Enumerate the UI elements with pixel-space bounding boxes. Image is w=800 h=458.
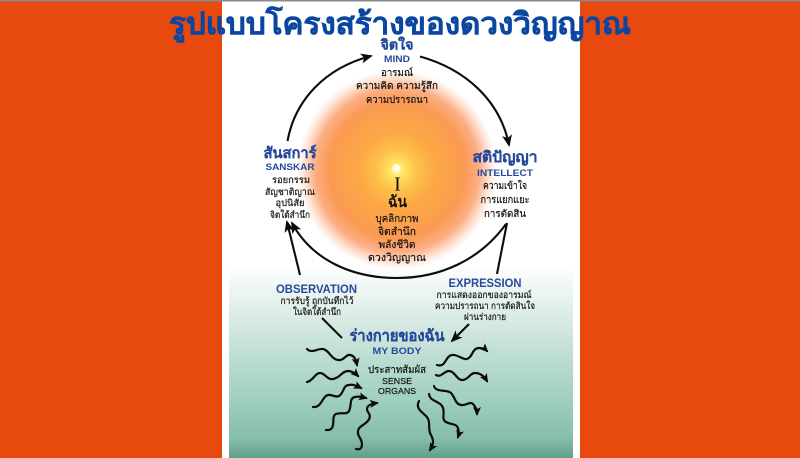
block: intellect: สติปัญญา	[472, 148, 538, 166]
block: mind: MIND	[384, 54, 411, 64]
block: intellect: การตัดสิน	[484, 209, 526, 220]
block: intellect: ความเข้าใจ	[483, 180, 527, 192]
block: sanskar: SANSKAR	[266, 162, 315, 172]
block: I: I	[394, 174, 401, 196]
wavy arrows: outgoing senses	[418, 348, 487, 450]
block: sanskar: สัญชาติญาณ	[265, 187, 315, 198]
block: my body: MY BODY	[372, 346, 422, 357]
block: observation	[276, 284, 357, 318]
arrow: expression to body	[452, 324, 469, 341]
block: mind: อารมณ์	[381, 67, 413, 79]
panel: white poster	[222, 2, 580, 458]
block: my body	[350, 327, 445, 396]
block: sanskar: อุปนิสัย	[276, 198, 304, 209]
line: expression up	[497, 223, 507, 274]
block: observation: ในจิตใต้สำนึก	[293, 306, 341, 318]
block: my body: SENSE	[382, 376, 412, 386]
wavy arrows: incoming senses	[307, 349, 377, 449]
block: observation: การรับรู้ ถูกบันทึกไว้	[280, 295, 354, 307]
block: I: ฉัน	[388, 193, 407, 211]
arrow: sanskar to mind	[288, 56, 371, 141]
block: expression: ผ่านร่างกาย	[464, 312, 506, 323]
block: expression: ความปรารถนา การตัดสินใจ	[435, 300, 535, 312]
block: I: ดวงวิญญาณ	[368, 252, 426, 264]
block: mind	[356, 36, 438, 106]
line: body to observation	[322, 318, 342, 338]
block: my body: ORGANS	[378, 386, 416, 396]
block: intellect	[472, 148, 538, 220]
icon: light point	[392, 164, 400, 172]
block: intellect: INTELLECT	[477, 168, 533, 179]
block: expression	[435, 278, 535, 323]
block: expression: การแสดงออกของอารมณ์	[436, 289, 532, 301]
block: expression: EXPRESSION	[448, 278, 522, 290]
block: sanskar: รอยกรรม	[272, 175, 310, 186]
top grey edge	[0, 0, 800, 2]
block: I: บุคลิกภาพ	[376, 213, 419, 225]
block: mind: ความคิด ความรู้สึก	[356, 80, 438, 92]
block: sanskar	[264, 144, 317, 221]
block: sanskar: จิตใต้สำนึก	[270, 209, 310, 221]
panel: green body zone	[229, 265, 573, 458]
arrow: observation up	[287, 222, 300, 275]
block: I	[368, 174, 426, 264]
block: mind: ความปรารถนา	[366, 95, 428, 106]
block: I: พลังชีวิต	[378, 238, 416, 251]
arrow: intellect to sanskar arc	[292, 223, 506, 278]
block: intellect: การแยกแยะ	[480, 195, 530, 206]
title: รูปแบบโครงสร้างของดวงวิญญาณ	[169, 5, 631, 43]
arrow: mind to intellect	[420, 56, 509, 145]
block: sanskar: สันสการ์	[264, 144, 317, 162]
block: I: จิตสำนึก	[378, 226, 416, 238]
block: observation: OBSERVATION	[276, 284, 357, 296]
block: my body: ร่างกายของฉัน	[350, 327, 445, 345]
block: mind: จิตใจ	[380, 36, 414, 52]
central glow	[297, 70, 497, 270]
block: my body: ประสาทสัมผัส	[368, 364, 427, 376]
